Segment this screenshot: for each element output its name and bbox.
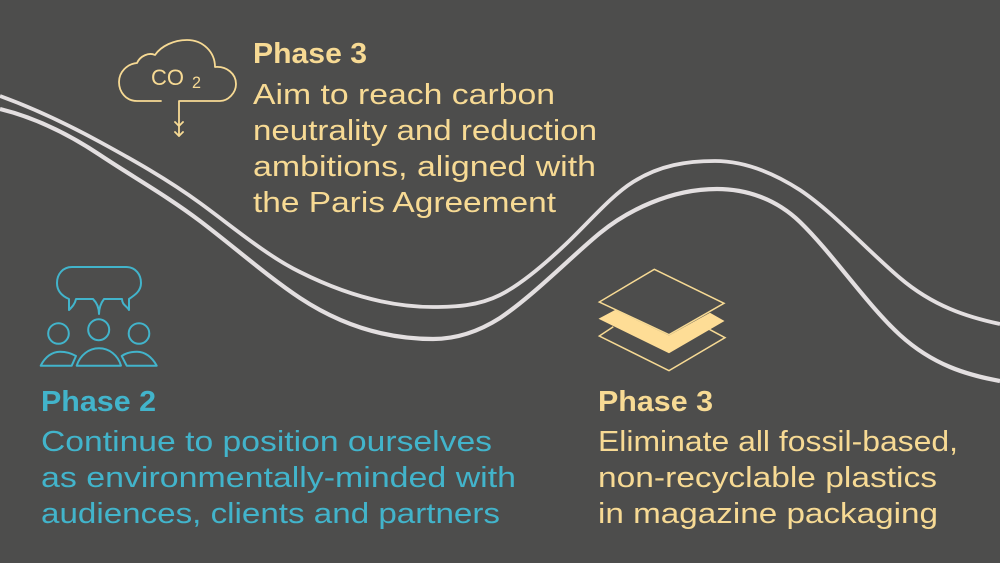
upper wave line <box>0 96 1000 324</box>
body text: Continue to position ourselves <box>41 426 492 458</box>
heading: Phase 3 <box>253 38 367 70</box>
body text: Eliminate all fossil-based, <box>598 426 958 458</box>
icon: stacked layers <box>598 269 725 371</box>
heading: Phase 3 <box>598 386 713 418</box>
lower wave line <box>0 109 1000 381</box>
body text: the Paris Agreement <box>253 187 556 219</box>
body text: non-recyclable plastics <box>598 462 937 494</box>
icon: people with speech bubbles <box>41 267 157 366</box>
icon: CO2 cloud with down arrow <box>119 40 236 136</box>
body text: ambitions, aligned with <box>253 151 596 183</box>
body text <box>253 79 597 219</box>
body text <box>598 426 958 530</box>
body text: neutrality and reduction <box>253 115 597 147</box>
panel: top phase 3 text <box>253 38 597 219</box>
panel: phase 2 text <box>41 386 516 530</box>
CO2 subscript: 2 <box>192 73 201 92</box>
body text: audiences, clients and partners <box>41 498 500 530</box>
heading: Phase 2 <box>41 386 156 418</box>
body text: in magazine packaging <box>598 498 938 530</box>
panel: bottom right phase 3 text <box>598 386 958 530</box>
body text <box>41 426 516 530</box>
body text: as environmentally-minded with <box>41 462 516 494</box>
CO2 label: CO <box>151 65 184 90</box>
body text: Aim to reach carbon <box>253 79 555 111</box>
